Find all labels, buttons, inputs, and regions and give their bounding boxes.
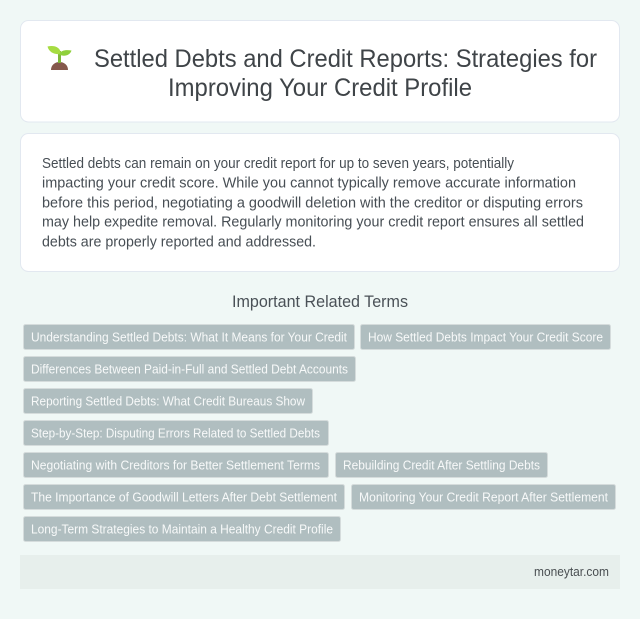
summary paragraph: Settled debts can remain on your credit report for up to seven years, potentially [42,156,515,172]
title: Settled Debts and Credit Reports: Strategies for [94,45,597,73]
tag: The Importance of Goodwill Letters After Debt Settlement [31,490,337,504]
footer [20,555,620,589]
footer source: moneytar.com [534,565,609,579]
tag [24,388,312,414]
title: Improving Your Credit Profile [168,74,472,102]
tag: Long-Term Strategies to Maintain a Healthy Credit Profile [31,522,333,536]
tag [24,484,344,510]
tag: Monitoring Your Credit Report After Settlement [359,490,608,504]
tag: Reporting Settled Debts: What Credit Bureaus Show [31,394,306,408]
summary paragraph: impacting your credit score. While you cannot typically remove accurate information [42,176,576,192]
tag [360,324,610,350]
summary paragraph: may help expedite removal. Regularly monitoring your credit report ensures all settled [42,214,584,230]
tag [24,356,356,382]
summary paragraph: debts are properly reported and addressed. [42,234,316,250]
tag: Differences Between Paid-in-Full and Settled Debt Accounts [31,362,348,376]
tag [24,420,328,446]
tag [336,452,548,478]
tag: Rebuilding Credit After Settling Debts [343,458,540,472]
summary paragraph [42,156,584,250]
tag [352,484,616,510]
tag list [24,324,616,542]
title [94,45,597,102]
tag [24,324,354,350]
tag [24,452,328,478]
summary paragraph: before this period, negotiating a goodwill deletion with the creditor or disputing errors [42,196,583,212]
tag: Understanding Settled Debts: What It Means for Your Credit [31,330,347,344]
tag: Step-by-Step: Disputing Errors Related to Settled Debts [31,426,320,440]
panel: summary [20,134,620,272]
tag: How Settled Debts Impact Your Credit Score [368,330,603,344]
panel: header [20,20,620,122]
tag [24,516,340,542]
heading: related terms: Important Related Terms [232,293,408,311]
tag: Negotiating with Creditors for Better Settlement Terms [31,458,320,472]
icon: seedling [48,46,72,70]
